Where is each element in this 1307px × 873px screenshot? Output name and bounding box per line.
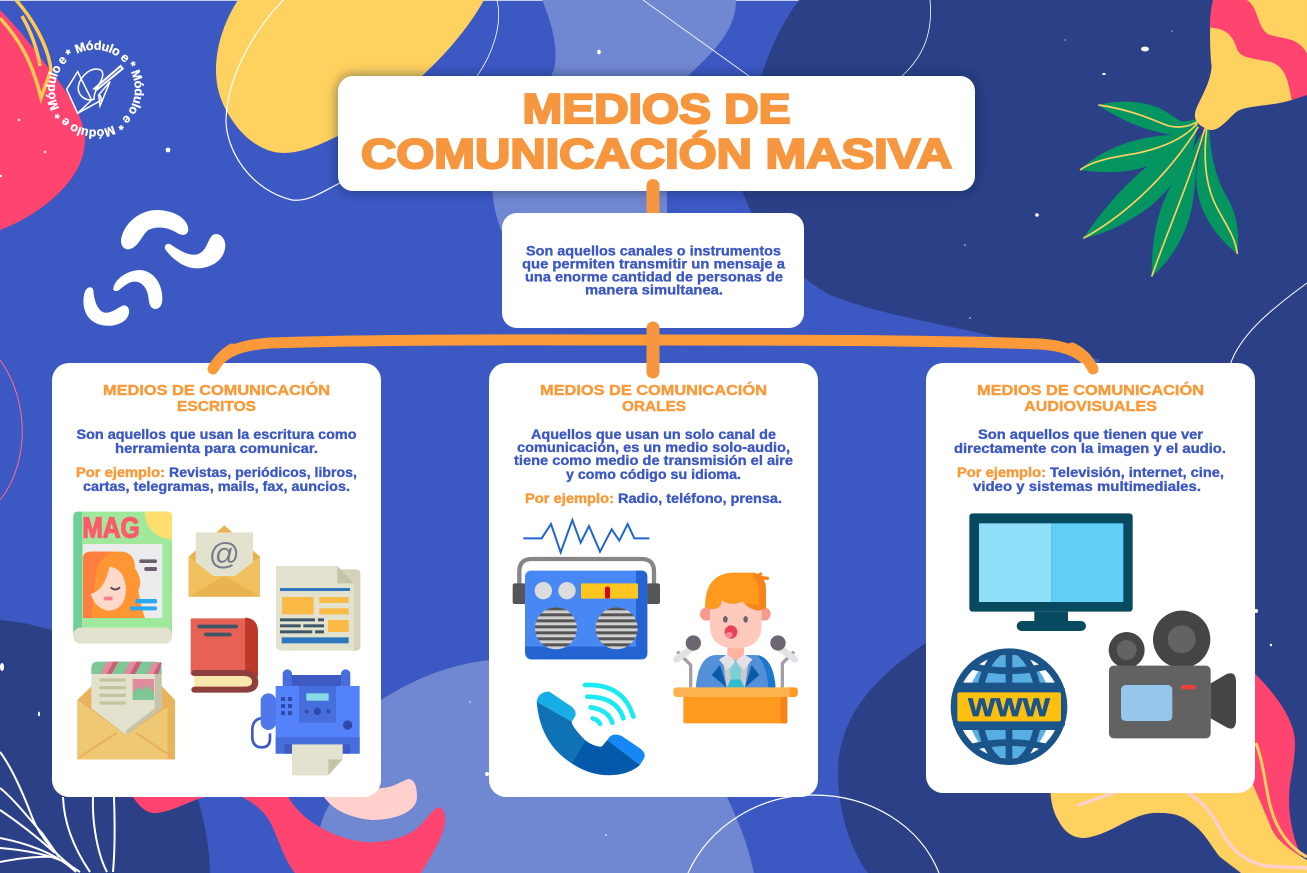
panel: escritos: [52, 349, 381, 797]
text: audiovisuales: Televisión, internet, cine,: [1050, 465, 1224, 480]
icon: magazine: [73, 512, 172, 644]
title: COMUNICACIÓN MASIVA: [361, 129, 952, 177]
text: orales: y como código su idioma.: [566, 467, 741, 482]
icon: open envelope: [77, 662, 175, 759]
icon: television: [969, 513, 1133, 631]
icon: fax: [252, 669, 360, 775]
definition text: Son aquellos canales o instrumentos: [526, 244, 781, 258]
icon: newspaper: [276, 566, 360, 651]
heading: orales: [540, 381, 767, 415]
heading: escritos: MEDIOS DE COMUNICACIÓN: [103, 381, 330, 399]
panel: orales: [489, 328, 818, 797]
text: audiovisuales: video y sistemas multimediales.: [973, 479, 1201, 494]
icons: audiovisuales: [950, 513, 1236, 767]
icon: magazine: MAG: [82, 512, 140, 544]
icon: globe www: [950, 647, 1068, 767]
text: orales: Aquellos que usan un solo canal de: [531, 427, 776, 442]
heading: escritos: ESCRITOS: [177, 399, 256, 415]
title: MEDIOS DE: [522, 85, 790, 132]
definition text: manera simultanea.: [585, 282, 723, 298]
definition box: [502, 213, 804, 328]
heading: audiovisuales: AUDIOVISUALES: [1024, 399, 1157, 415]
icons: orales: [513, 520, 798, 775]
text: orales: Por ejemplo:: [525, 491, 614, 506]
heading: audiovisuales: MEDIOS DE COMUNICACIÓN: [977, 381, 1204, 399]
definition text: que permiten transmitir un mensaje a: [522, 256, 785, 272]
text: orales: comunicación, es un medio solo-audio,: [517, 440, 790, 455]
icon: speaker at podium: [673, 573, 798, 723]
icon: radio: [513, 520, 660, 659]
icon: globe www: WWW: [968, 694, 1050, 722]
panel: audiovisuales: [926, 348, 1255, 793]
leaves: [1080, 102, 1238, 277]
text: audiovisuales: [954, 427, 1226, 494]
definition text: [522, 244, 785, 298]
decorative white squiggles: [83, 210, 225, 326]
heading: escritos: [103, 381, 330, 415]
text: orales: Radio, teléfono, prensa.: [618, 491, 782, 506]
icon: email: @: [209, 537, 240, 571]
definition text: una enorme cantidad de personas de: [525, 270, 783, 284]
text: escritos: cartas, telegramas, mails, fax, auncios.: [83, 479, 350, 494]
connector stub: [646, 186, 660, 215]
text: orales: tiene como medio de transmisión el aire: [514, 453, 793, 468]
title: [361, 85, 952, 177]
text: escritos: [76, 427, 357, 494]
connector lines: [213, 340, 1093, 369]
text: orales: [514, 427, 793, 506]
icon: email: [189, 525, 260, 597]
logo: Módulo e: Módulo e * Módulo e * Módulo e * Módulo e *: [46, 40, 144, 139]
text: escritos: Por ejemplo:: [76, 465, 165, 480]
text: audiovisuales: Son aquellos que tienen que ver: [978, 427, 1204, 442]
heading: audiovisuales: [977, 381, 1204, 415]
text: audiovisuales: directamente con la imagen y el audio.: [954, 441, 1226, 456]
leaf veins: [1080, 105, 1237, 277]
flower: [1195, 0, 1307, 130]
heading: orales: ORALES: [622, 399, 686, 415]
icon: telephone: [537, 685, 645, 775]
icon: book: [191, 618, 258, 693]
heading: orales: MEDIOS DE COMUNICACIÓN: [540, 381, 767, 399]
icon: video camera: [1109, 611, 1236, 738]
text: audiovisuales: Por ejemplo:: [957, 465, 1046, 480]
text: escritos: herramienta para comunicar.: [115, 441, 318, 456]
text: escritos: Revistas, periódicos, libros,: [169, 465, 357, 480]
title box: [338, 76, 975, 191]
icon: book and pen: [67, 66, 123, 113]
text: escritos: Son aquellos que usan la escritura como: [76, 427, 356, 442]
plant illustration top right: [1080, 0, 1307, 277]
icons: escritos: [73, 512, 360, 775]
